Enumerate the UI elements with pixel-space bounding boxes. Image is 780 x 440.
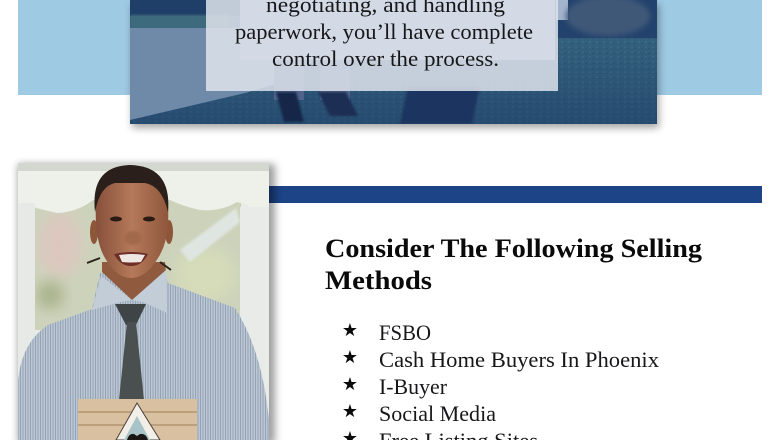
tie [115, 304, 146, 400]
light blue banner [18, 0, 762, 95]
braids [87, 258, 171, 270]
intro paragraph [235, 0, 533, 71]
collar [92, 276, 132, 310]
nose [125, 231, 140, 245]
star bullets: ★ [342, 401, 358, 422]
smile [114, 252, 148, 266]
text overlay box [206, 0, 558, 91]
heading: Consider The Following Selling [325, 233, 702, 263]
blue header bar [269, 186, 762, 203]
hair [94, 165, 168, 212]
shirt [18, 272, 269, 440]
photo scene [130, 0, 657, 124]
heading [325, 233, 702, 295]
panel: portrait photo [18, 163, 275, 440]
neck [102, 262, 166, 300]
panel shadow [132, 4, 659, 128]
selling methods list: Social Media [379, 401, 496, 426]
intro paragraph: control over the process. [272, 46, 499, 71]
intro paragraph: paperwork, you’ll have complete [235, 19, 533, 44]
selling methods list [379, 320, 659, 440]
selling methods list: I-Buyer [379, 374, 447, 399]
panel: photo with blue overlay [130, 0, 659, 128]
portrait scene [18, 163, 269, 440]
eyes [110, 216, 155, 222]
curtain valance [35, 200, 241, 213]
star bullets: ★ [342, 347, 358, 368]
star bullets: ★ [342, 320, 358, 341]
star bullets: ★ [342, 374, 358, 395]
heading: Methods [325, 265, 432, 295]
head [96, 180, 168, 278]
ears [90, 220, 173, 244]
portrait shadow [18, 164, 275, 440]
selling methods list: Cash Home Buyers In Phoenix [379, 347, 659, 372]
model house [78, 399, 197, 440]
selling methods list: FSBO [379, 320, 431, 345]
star bullets [342, 320, 358, 440]
